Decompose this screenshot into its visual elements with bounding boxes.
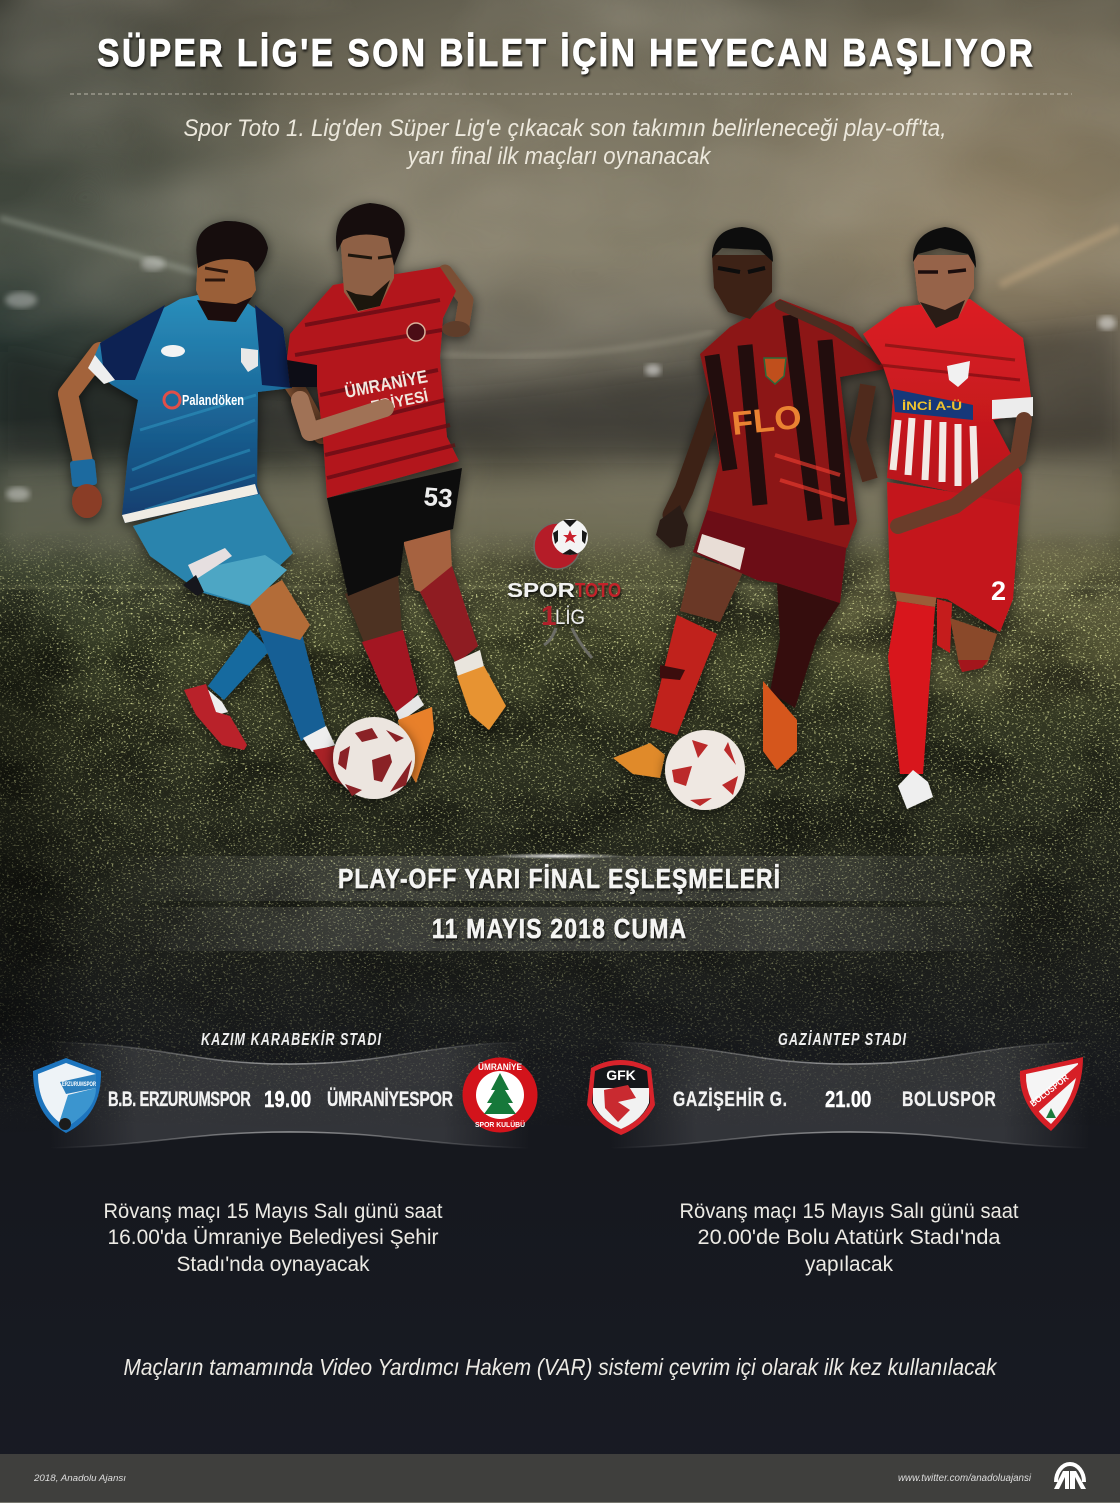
league logo: Spor Toto 1. Lig: TOTO bbox=[575, 580, 621, 602]
hair bbox=[336, 203, 405, 266]
return leg note: left: 16.00'da Ümraniye Belediyesi Şehir bbox=[108, 1226, 438, 1249]
kick-off time: 19.00 bbox=[264, 1087, 311, 1113]
face bbox=[712, 255, 772, 319]
far arm bbox=[277, 360, 322, 435]
team name: BOLUSPOR bbox=[902, 1087, 996, 1111]
subtitle bbox=[184, 115, 946, 170]
team name: B.B. ERZURUMSPOR bbox=[108, 1087, 251, 1111]
crescent bbox=[534, 523, 580, 569]
background: stadium and pitch bbox=[0, 0, 1120, 1122]
back leg bbox=[770, 583, 840, 708]
front sock bbox=[888, 601, 935, 774]
club badge on jersey bbox=[764, 358, 786, 384]
player: B.B. Erzurumspor: Palandöken bbox=[182, 392, 244, 409]
player: Ümraniyespor bbox=[287, 203, 506, 783]
hair bbox=[913, 227, 976, 268]
league logo: Spor Toto 1. Lig: LİG bbox=[555, 606, 585, 629]
near arm bbox=[672, 400, 716, 515]
league logo: Spor Toto 1. Lig: 1 bbox=[541, 600, 557, 631]
face bbox=[913, 255, 974, 328]
right hand arm bbox=[445, 272, 466, 325]
league logo: Spor Toto 1. Lig: SPOR bbox=[507, 580, 576, 602]
subtitle: yarı final ilk maçları oynanacak bbox=[406, 143, 712, 170]
return leg note: left: Rövanş maçı 15 Mayıs Salı günü saat bbox=[104, 1200, 443, 1223]
heading band: date: 11 MAYIS 2018 CUMA bbox=[432, 914, 686, 945]
subtitle: Spor Toto 1. Lig'den Süper Lig'e çıkacak son takımın belirleneceği play-off'ta, bbox=[184, 115, 946, 142]
return leg note: left bbox=[104, 1200, 443, 1276]
captain armband bbox=[992, 397, 1033, 419]
stadium name: KAZIM KARABEKİR STADI bbox=[201, 1030, 382, 1050]
back leg bbox=[403, 528, 452, 595]
sponsor panel bbox=[893, 389, 973, 420]
forearm across body bbox=[300, 400, 385, 432]
copyright: 2018, Anadolu Ajansı bbox=[33, 1473, 126, 1484]
face bbox=[196, 255, 256, 322]
face bbox=[340, 232, 394, 312]
boot bbox=[898, 770, 933, 809]
near arm bbox=[68, 352, 100, 462]
player: Ümraniyespor: EDİYESİ bbox=[369, 387, 430, 416]
player: Boluspor bbox=[858, 227, 1033, 809]
VAR note: Maçların tamamında Video Yardımcı Hakem (VAR) sistemi çevrim içi olarak ilk kez kullanılacak bbox=[124, 1354, 998, 1380]
logo: Ümraniyespor bbox=[462, 1058, 538, 1132]
back leg bbox=[937, 599, 952, 653]
icon: AA logo bbox=[1054, 1464, 1086, 1489]
match panel: right bbox=[587, 1030, 1090, 1148]
front leg bbox=[345, 574, 402, 645]
shorts bbox=[887, 482, 1020, 632]
thigh bbox=[893, 572, 940, 607]
return leg note: right: Rövanş maçı 15 Mayıs Salı günü saat bbox=[680, 1200, 1019, 1223]
title: SÜPER LİG'E SON BİLET İÇİN HEYECAN BAŞLIYOR bbox=[97, 31, 1033, 75]
jersey bbox=[863, 299, 1033, 506]
football: right pair bbox=[665, 730, 745, 810]
logo: Ümraniyespor: ÜMRANİYE bbox=[478, 1062, 522, 1072]
league logo: Spor Toto 1. Lig bbox=[507, 519, 621, 658]
front sock bbox=[650, 615, 717, 735]
boot back bbox=[763, 681, 797, 770]
dashed divider under title bbox=[70, 93, 1072, 95]
boots bbox=[184, 684, 247, 750]
logo: Erzurumspor bbox=[33, 1058, 101, 1133]
team name: GAZİŞEHİR G. bbox=[673, 1087, 787, 1111]
number: 2 bbox=[991, 576, 1006, 606]
lower legs bbox=[208, 630, 270, 700]
logo: Gazişehir: GFK bbox=[606, 1067, 636, 1083]
shorts bbox=[693, 510, 847, 603]
shorts bbox=[327, 468, 462, 596]
logo: Boluspor bbox=[1020, 1057, 1083, 1131]
jersey bbox=[90, 295, 292, 523]
heading band: date bbox=[107, 907, 1021, 951]
heading band: play-off bbox=[107, 853, 1021, 901]
return leg note: right bbox=[680, 1200, 1019, 1276]
match panel: left bbox=[33, 1030, 538, 1148]
boot front bbox=[613, 743, 665, 778]
football: left pair bbox=[333, 717, 415, 799]
return leg note: left: Stadı'nda oynayacak bbox=[176, 1253, 370, 1276]
jersey bbox=[700, 299, 885, 548]
team name: ÜMRANİYESPOR bbox=[327, 1087, 454, 1111]
ball bbox=[552, 519, 588, 555]
jersey logos bbox=[161, 345, 185, 357]
logo: Gazişehir bbox=[587, 1060, 655, 1135]
back arm bbox=[858, 385, 870, 480]
arm across body bbox=[898, 420, 1024, 526]
player: B.B. Erzurumspor bbox=[68, 221, 345, 786]
logo: Boluspor: BOLUSPOR bbox=[1028, 1072, 1071, 1109]
shorts bbox=[133, 490, 293, 606]
return leg note: right: 20.00'de Bolu Atatürk Stadı'nda bbox=[698, 1226, 1001, 1249]
player: Ümraniyespor: ÜMRANİYE bbox=[343, 366, 429, 402]
knee and thigh bbox=[247, 580, 310, 640]
kick-off time: 21.00 bbox=[825, 1087, 871, 1113]
jersey bbox=[287, 267, 459, 498]
white jersey stripes bbox=[893, 418, 975, 488]
forearm bbox=[780, 305, 880, 360]
hair bbox=[196, 221, 268, 272]
neck bbox=[205, 290, 248, 322]
player: Gazişehir Gaziantep bbox=[613, 227, 885, 778]
front thigh bbox=[680, 556, 743, 622]
player: Boluspor: İNCİ A-Ü bbox=[902, 398, 962, 413]
footer bbox=[0, 1454, 1120, 1503]
stadium name: GAZİANTEP STADI bbox=[778, 1030, 907, 1050]
number 53: 53 bbox=[422, 481, 454, 513]
logo: Ümraniyespor: SPOR KULÜBÜ bbox=[475, 1120, 525, 1129]
return leg note: right: yapılacak bbox=[805, 1253, 893, 1276]
sponsor FLO: FLO bbox=[730, 398, 803, 442]
twitter address: www.twitter.com/anadoluajansi bbox=[898, 1473, 1032, 1484]
hair bbox=[712, 227, 773, 262]
logo: Erzurumspor: ERZURUMSPOR bbox=[62, 1081, 96, 1088]
heading band: play-off: PLAY-OFF YARI FİNAL EŞLEŞMELERİ bbox=[338, 864, 780, 895]
club badge on jersey bbox=[947, 361, 970, 387]
